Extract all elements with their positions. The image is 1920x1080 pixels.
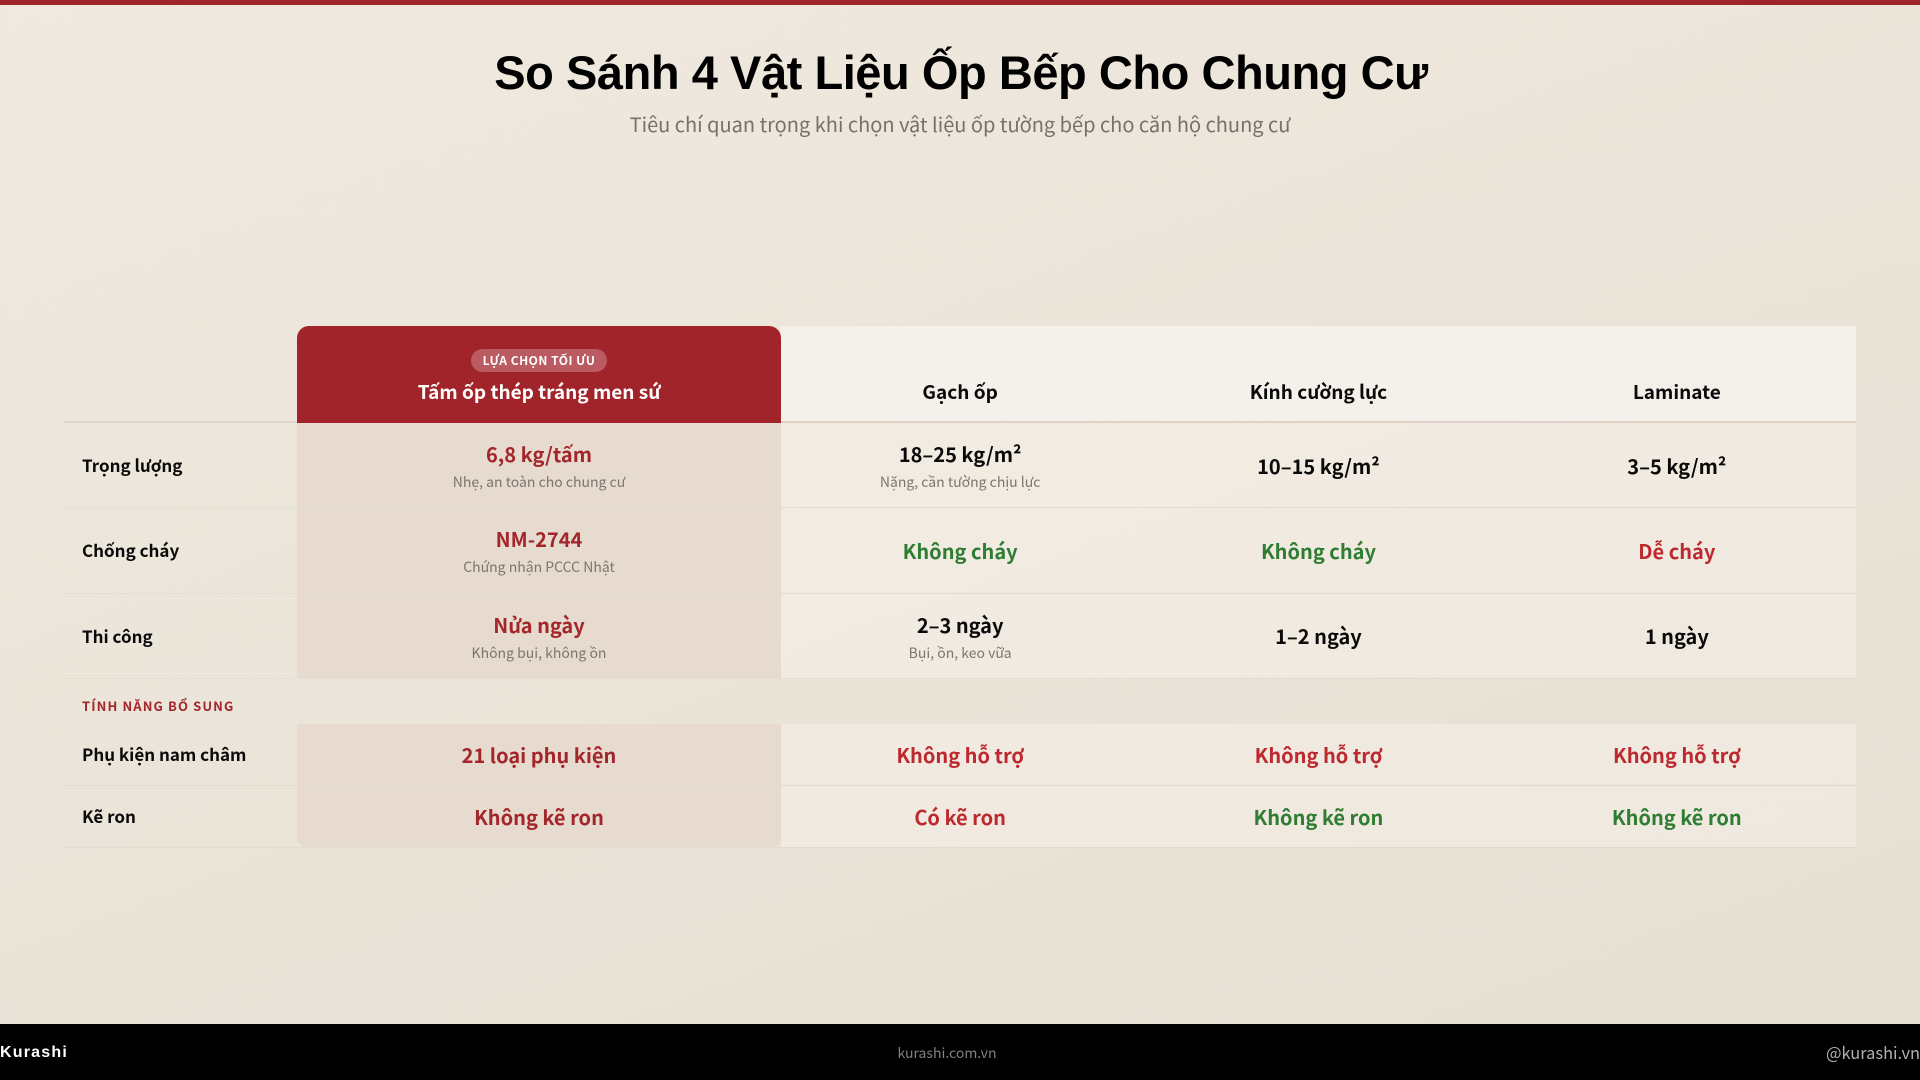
label: grout lines: Kẽ ron — [82, 803, 136, 828]
cell: glass accessories — [1139, 724, 1498, 785]
header: laminate: Laminate — [1633, 378, 1721, 404]
cell: steel panel fire rating — [297, 508, 781, 593]
cell: tile weight: Nặng, cần tường chịu lực — [880, 472, 1040, 492]
row: magnetic accessories — [64, 724, 1856, 786]
label: weight: Trọng lượng — [82, 452, 182, 476]
footer handle: @kurashi.vn — [1826, 1040, 1920, 1064]
cell: glass installation: 1–2 ngày — [1275, 620, 1362, 650]
top accent bar — [0, 0, 1920, 5]
cell: steel panel fire rating: Chứng nhận PCCC Nhật — [463, 557, 615, 577]
cell: laminate weight: 3–5 kg/m² — [1627, 450, 1726, 480]
cell: steel panel weight: 6,8 kg/tấm — [486, 438, 592, 468]
cell: tile fire rating: Không cháy — [903, 536, 1018, 565]
cell: steel panel weight — [297, 423, 781, 507]
cell: glass accessories: Không hỗ trợ — [1255, 740, 1382, 769]
cell: glass installation — [1139, 594, 1498, 678]
cell: laminate installation: 1 ngày — [1645, 620, 1709, 650]
cell: laminate installation — [1498, 594, 1856, 678]
cell: tile fire rating — [781, 508, 1139, 593]
label: magnetic accessories: Phụ kiện nam châm — [82, 741, 246, 766]
cell: tile accessories: Không hỗ trợ — [896, 740, 1024, 769]
cell: laminate accessories — [1498, 724, 1856, 785]
header: tempered glass: Kính cường lực — [1250, 378, 1387, 404]
cell: steel panel accessories: 21 loại phụ kiện — [462, 740, 616, 769]
row: weight — [64, 423, 1856, 508]
footer brand: Kurashi — [0, 1044, 68, 1061]
label: fire resistance: Chống cháy — [82, 537, 179, 562]
title: So Sánh 4 Vật Liệu Ốp Bếp Cho Chung Cư — [494, 46, 1428, 99]
section label: additional features: TÍNH NĂNG BỔ SUNG — [82, 696, 234, 715]
subtitle: Tiêu chí quan trọng khi chọn vật liệu ốp tường bếp cho căn hộ chung cư — [630, 109, 1290, 138]
cell: laminate grout: Không kẽ ron — [1612, 802, 1742, 831]
cell: glass fire rating: Không cháy — [1261, 536, 1376, 565]
footer bar — [0, 1024, 1920, 1080]
cell: tile grout: Có kẽ ron — [914, 802, 1006, 831]
header: tile — [781, 326, 1139, 421]
cell: glass weight — [1139, 423, 1498, 507]
row: grout lines — [64, 786, 1856, 848]
cell: laminate fire rating: Dễ cháy — [1638, 536, 1715, 565]
header: featured material — [297, 326, 781, 423]
badge: best choice — [471, 349, 607, 372]
badge: best choice: LỰA CHỌN TỐI ƯU — [483, 352, 595, 369]
cell: glass grout — [1139, 786, 1498, 847]
row: installation — [64, 594, 1856, 679]
featured material name: Tấm ốp thép tráng men sứ — [418, 378, 660, 405]
comparison table — [64, 326, 1856, 848]
cell: tile weight — [781, 423, 1139, 507]
cell: laminate grout — [1498, 786, 1856, 847]
cell: glass fire rating — [1139, 508, 1498, 593]
cell: steel panel accessories — [297, 724, 781, 785]
row: fire resistance — [64, 508, 1856, 594]
cell: steel panel weight: Nhẹ, an toàn cho chung cư — [453, 472, 625, 492]
cell: glass grout: Không kẽ ron — [1254, 802, 1383, 831]
cell: tile grout — [781, 786, 1139, 847]
cell: laminate fire rating — [1498, 508, 1856, 593]
cell: steel panel installation: Không bụi, không ồn — [472, 642, 606, 662]
cell: steel panel grout: Không kẽ ron — [474, 802, 604, 831]
table header row — [64, 326, 1856, 423]
header: laminate — [1498, 326, 1856, 421]
cell: tile accessories — [781, 724, 1139, 785]
cell: laminate weight — [1498, 423, 1856, 507]
label: installation: Thi công — [82, 622, 153, 648]
cell: tile installation: 2–3 ngày — [917, 610, 1003, 638]
cell: steel panel grout — [297, 786, 781, 847]
cell: tile installation: Bụi, ồn, keo vữa — [909, 642, 1012, 662]
footer website: kurashi.com.vn — [897, 1043, 996, 1063]
cell: steel panel installation — [297, 594, 781, 678]
cell: steel panel fire rating: NM-2744 — [496, 524, 582, 553]
cell: tile installation — [781, 594, 1139, 678]
cell: laminate accessories: Không hỗ trợ — [1613, 740, 1741, 769]
cell: tile weight: 18–25 kg/m² — [899, 438, 1021, 468]
header: tempered glass — [1139, 326, 1498, 421]
cell: steel panel installation: Nửa ngày — [493, 610, 585, 638]
cell: glass weight: 10–15 kg/m² — [1257, 450, 1380, 480]
header: tile: Gạch ốp — [922, 378, 998, 404]
